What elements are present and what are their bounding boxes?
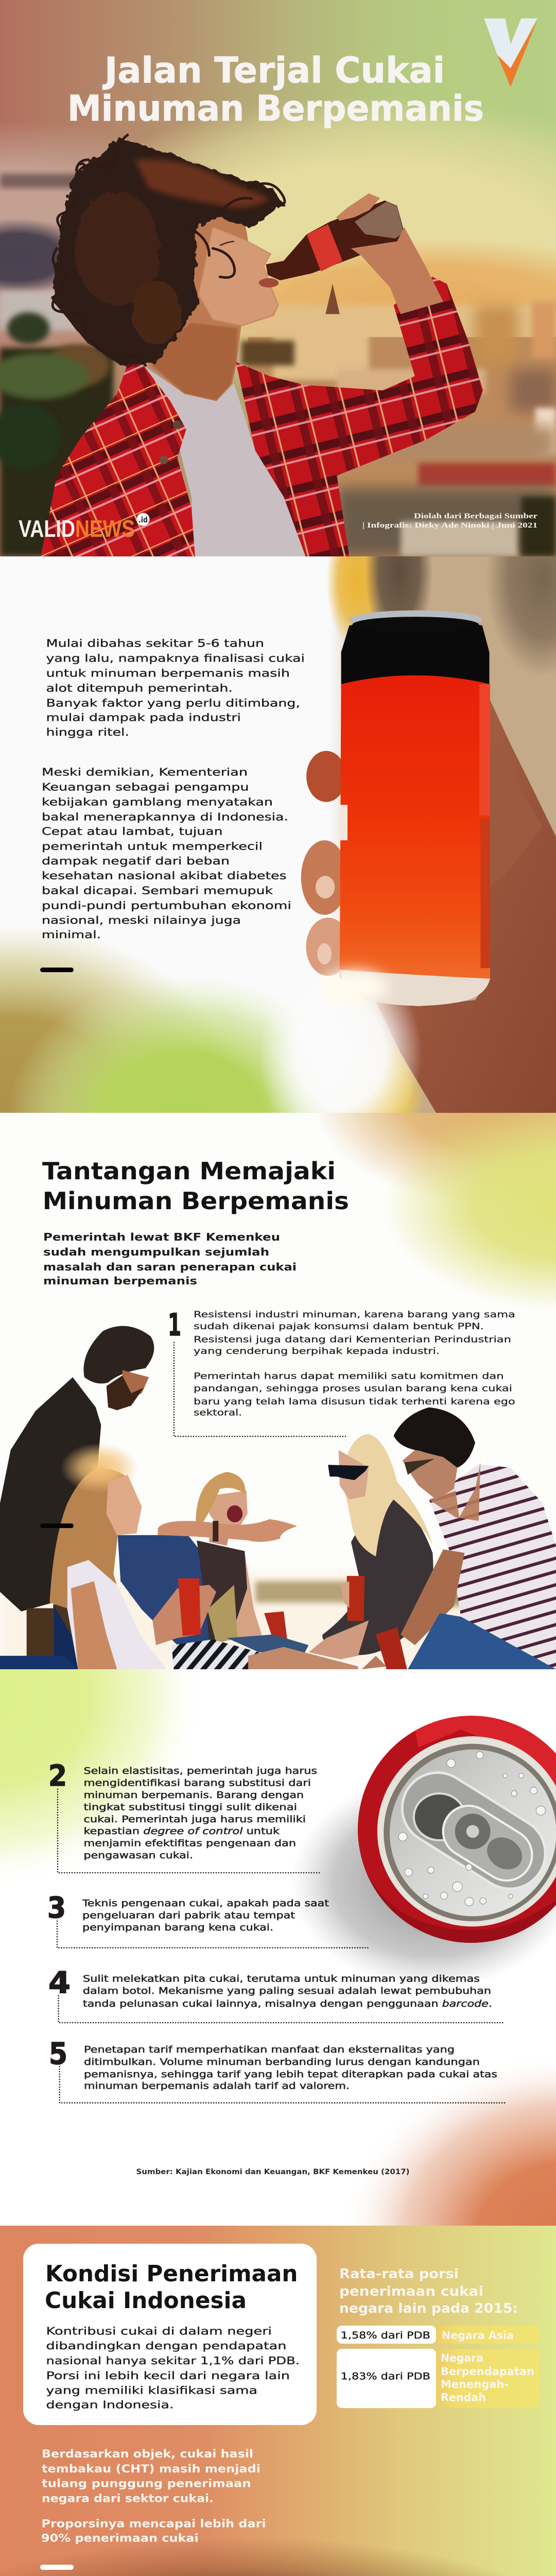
friend: man in dark shirt [0, 1326, 154, 1669]
text block: intro paragraph 2: kebijakan gamblang menyatakan [42, 795, 273, 808]
point 3: pengeluaran dari pabrik atau tempat [82, 1910, 295, 1921]
heading: Tantangan Memajaki Minuman Berpemanis: Minuman Berpemanis [43, 1187, 349, 1215]
title: Jalan Terjal Cukai [102, 50, 445, 91]
stat row: lower-middle income countries: Berpendapatan [441, 2365, 534, 2378]
stat row: Negara Asia: Negara Asia [442, 2329, 514, 2342]
point 5: pemanisnya, sehingga tarif yang lebih tepat diterapkan pada cukai atas [84, 2070, 497, 2080]
credit text: | Infografis: Dieky Ade Ninoki | Juni 2021 [362, 521, 537, 530]
title [67, 50, 484, 129]
stat row: Negara Asia [337, 2326, 539, 2344]
text block: subheading: Pemerintah lewat BKF Kemenkeu [43, 1231, 280, 1243]
point 1: pandangan, sehingga proses usulan barang kena cukai [194, 1384, 512, 1394]
friend: man in striped shirt [362, 1408, 556, 1669]
logo: Validnews [19, 513, 149, 542]
text block: intro paragraph 2: Cepat atau lambat, tujuan [42, 825, 222, 838]
point 4: 4 [48, 1965, 71, 2000]
panel: excise revenue condition [0, 2226, 556, 2576]
heading: other countries average [339, 2266, 518, 2316]
icon: V logo [484, 19, 537, 87]
text block: intro paragraph 1: yang lalu, nampaknya finalisasi cukai [46, 652, 305, 665]
credit text: Diolah dari Berbagai Sumber [414, 512, 538, 520]
point 1: Pemerintah harus dapat memiliki satu komitmen dan [194, 1371, 504, 1382]
card: Kondisi Penerimaan Cukai Indonesia: yang memiliki klasifikasi sama [46, 2384, 257, 2397]
point 1: Resistensi juga datang dari Kementerian Perindustrian [194, 1335, 511, 1345]
stat row: Negara Asia: 1,58% dari PDB [341, 2330, 430, 2341]
text block: tobacco excise [41, 2448, 266, 2545]
stat row: lower-middle income countries [337, 2349, 539, 2408]
text block: intro paragraph 2: pundi-pundi pertumbuhan ekonomi [42, 900, 291, 912]
card: Kondisi Penerimaan Cukai Indonesia: dengan Indonesia. [46, 2399, 174, 2411]
point 2: pengawasan cukai. [83, 1851, 193, 1861]
card: Kondisi Penerimaan Cukai Indonesia: Kontribusi cukai di dalam negeri [46, 2325, 272, 2337]
title: Minuman Berpemanis [67, 88, 484, 129]
text block: tobacco excise: negara dari sektor cukai. [42, 2493, 214, 2505]
point 1: sudah dikenai pajak konsumsi dalam bentuk PPN. [194, 1321, 484, 1332]
heading: other countries average: penerimaan cukai [339, 2284, 483, 2299]
point 2: menjamin efektifitas pengenaan dan [83, 1839, 296, 1849]
source note: Sumber: Kajian Ekonomi dan Keuangan, BKF Kemenkeu (2017) [136, 2168, 410, 2176]
point 1 [168, 1307, 515, 1436]
text block: intro paragraph 2 [42, 766, 291, 941]
text block: intro paragraph 1: untuk minuman berpemanis masih [46, 667, 290, 679]
text block: subheading: minuman berpemanis [43, 1275, 197, 1287]
point 1: yang cenderung berpihak kepada industri. [194, 1346, 440, 1357]
text block: intro paragraph 1: mulai dampak pada industri [46, 711, 241, 724]
text block: intro paragraph 1: alot ditempuh pemerintah. [46, 682, 233, 694]
text block: intro paragraph 2: nasional, meski nilainya juga [42, 914, 241, 926]
text block: intro paragraph 2: bakal menerapkannya di Indonesia. [42, 810, 288, 823]
card: Kondisi Penerimaan Cukai Indonesia [23, 2244, 317, 2425]
logo: Validnews: .id [138, 515, 148, 524]
hair [53, 135, 285, 365]
text block: intro paragraph 1: Banyak faktor yang perlu ditimbang, [46, 697, 300, 709]
point 5: 5 [49, 2036, 67, 2071]
point 2: Selain elastisitas, pemerintah juga harus [83, 1766, 317, 1776]
text block: intro paragraph 2: pemerintah untuk memperkecil [42, 840, 263, 853]
card: Kondisi Penerimaan Cukai Indonesia: dibandingkan dengan pendapatan [46, 2340, 286, 2352]
divider bar [40, 1523, 74, 1528]
point 2 [48, 1759, 320, 1873]
logo: Validnews: VALID [19, 515, 75, 542]
point 4: dalam botol. Mekanisme yang paling sesuai adalah lewat pembubuhan [83, 1986, 491, 1996]
text block: intro paragraph 2: Keuangan sebagai pengampu [42, 781, 249, 793]
point 2: kepastian degree of control untuk [83, 1826, 280, 1837]
logo: Validnews: NEWS [75, 515, 135, 542]
text block: intro paragraph 2: Meski demikian, Kementerian [42, 766, 248, 778]
card: Kondisi Penerimaan Cukai Indonesia: Porsi ini lebih kecil dari negara lain [46, 2369, 290, 2382]
panel: intro with can in hand [0, 556, 556, 1113]
stat row: lower-middle income countries: 1,83% dari PDB [341, 2371, 430, 2382]
text block: intro paragraph 1: Mulai dibahas sekitar 5-6 tahun [46, 637, 264, 650]
point 3: penyimpanan barang kena cukai. [82, 1923, 273, 1933]
point 1: Resistensi industri minuman, karena barang yang sama [194, 1310, 515, 1320]
credit text [362, 512, 538, 530]
point 5: minuman berpemanis adalah tarif ad valorem. [84, 2081, 350, 2092]
text block: subheading: masalah dan saran penerapan cukai [43, 1261, 297, 1273]
panel: can top view and points 2 to 5 [0, 1669, 556, 2226]
point 5: Penetapan tarif memperhatikan manfaat dan eksternalitas yang [84, 2045, 455, 2055]
point 5: ditimbulkan. Volume minuman berbanding lurus dengan kandungan [84, 2057, 480, 2067]
point 3: 3 [47, 1891, 66, 1925]
point 4: Sulit melekatkan pita cukai, terutama untuk minuman yang dikemas [83, 1974, 480, 1985]
friend: blonde woman with sunglasses [308, 1434, 433, 1659]
text block: intro paragraph 2: kesehatan nasional akibat diabetes [42, 870, 286, 882]
text block: tobacco excise: tembakau (CHT) masih menjadi [42, 2463, 260, 2475]
point 4 [48, 1965, 503, 2023]
point 1: baru yang telah lama disusun tidak terhenti karena ego [194, 1397, 515, 1407]
point 2: minuman berpemanis. Barang dengan [83, 1790, 304, 1801]
point 2: mengidentifikasi barang substitusi dari [83, 1778, 311, 1789]
point 2: 2 [48, 1759, 67, 1793]
text block: intro paragraph 1: hingga ritel. [46, 726, 129, 738]
friend: woman with long hair [49, 1443, 216, 1669]
card: Kondisi Penerimaan Cukai Indonesia: nasional hanya sekitar 1,1% dari PDB. [46, 2354, 300, 2367]
point 3: Teknis pengenaan cukai, apakah pada saat [82, 1899, 329, 1909]
can viewed from above [355, 1712, 556, 1946]
card: Kondisi Penerimaan Cukai Indonesia: Kondisi Penerimaan [45, 2261, 298, 2287]
heading: Tantangan Memajaki Minuman Berpemanis: Tantangan Memajaki [42, 1157, 336, 1185]
text block: intro paragraph 2: bakal dicapai. Sembari memupuk [42, 885, 273, 897]
text block: tobacco excise: tulang punggung penerimaan [42, 2478, 251, 2490]
text block: tobacco excise: 90% penerimaan cukai [41, 2532, 199, 2545]
panel: challenges with friends photo [0, 1113, 556, 1669]
stat row: lower-middle income countries: Negara [441, 2352, 483, 2364]
point 4: tanda pelunasan cukai lainnya, misalnya dengan penggunaan barcode . [83, 1999, 492, 2009]
point 5 [49, 2036, 505, 2103]
text block: intro paragraph 2: minimal. [42, 928, 101, 941]
text block: subheading: sudah mengumpulkan sejumlah [43, 1246, 269, 1258]
text block: intro paragraph 1 [46, 637, 305, 738]
text block: tobacco excise: Berdasarkan objek, cukai hasil [42, 2448, 253, 2460]
point 2: tingkat substitusi tinggi sulit dikenai [83, 1802, 297, 1812]
card: Kondisi Penerimaan Cukai Indonesia: Cukai Indonesia [45, 2287, 247, 2314]
stat row: lower-middle income countries: Rendah [441, 2392, 486, 2404]
heading: other countries average: Rata-rata porsi [339, 2266, 459, 2282]
stat row: lower-middle income countries: Menengah- [441, 2378, 509, 2391]
point 1: 1 [168, 1307, 181, 1343]
text block: tobacco excise: Proporsinya mencapai lebih dari [41, 2518, 266, 2530]
divider bar [40, 968, 74, 972]
point 1: sektoral. [194, 1408, 242, 1418]
text block: intro paragraph 2: dampak negatif dari beban [42, 855, 230, 867]
heading: other countries average: negara lain pada 2015: [339, 2301, 518, 2316]
divider bar [40, 2565, 74, 2570]
point 2: cukai. Pemerintah juga harus memiliki [83, 1815, 306, 1825]
friend: laughing woman [158, 1472, 297, 1643]
heading: Tantangan Memajaki Minuman Berpemanis [42, 1157, 349, 1215]
point 3 [47, 1891, 370, 1948]
panel: hero photo with title [0, 0, 556, 556]
text block: subheading [43, 1231, 297, 1287]
